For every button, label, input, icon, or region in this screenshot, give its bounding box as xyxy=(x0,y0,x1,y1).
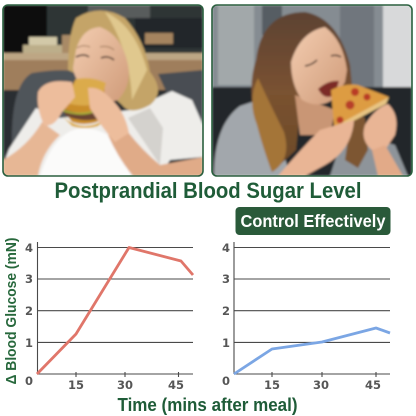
chart: uncontrolled glucose: 4 xyxy=(25,241,33,255)
badge: control effectively xyxy=(236,207,390,235)
photo: woman eating burger xyxy=(3,5,203,176)
chart: uncontrolled glucose: 15 xyxy=(68,378,84,392)
chart: uncontrolled glucose: 1 xyxy=(25,336,33,350)
chart: uncontrolled glucose: 45 xyxy=(168,378,184,392)
title: Postprandial Blood Sugar Level xyxy=(54,178,362,203)
badge: control effectively: Control Effectively xyxy=(240,211,386,231)
chart: controlled glucose: 0 xyxy=(222,374,230,388)
chart: controlled glucose xyxy=(222,241,390,392)
chart: controlled glucose: 3 xyxy=(222,272,230,286)
chart: uncontrolled glucose xyxy=(25,241,193,392)
chart: controlled glucose: 15 xyxy=(264,378,280,392)
chart: controlled glucose: 4 xyxy=(222,241,230,255)
chart: controlled glucose: 2 xyxy=(222,304,230,318)
photo: woman eating pizza xyxy=(212,5,412,176)
line: red glucose curve xyxy=(37,248,193,374)
chart: uncontrolled glucose: 0 xyxy=(25,374,33,388)
x axis label: Time (mins after meal) xyxy=(118,395,298,415)
chart: uncontrolled glucose: 2 xyxy=(25,304,33,318)
y axis label: Δ Blood Glucose (mN) xyxy=(3,238,20,384)
chart: controlled glucose: 45 xyxy=(365,378,381,392)
line: blue glucose curve xyxy=(234,328,390,374)
chart: controlled glucose: 1 xyxy=(222,336,230,350)
chart: controlled glucose: 30 xyxy=(313,378,329,392)
chart: uncontrolled glucose: 30 xyxy=(117,378,133,392)
chart: uncontrolled glucose: 3 xyxy=(25,272,33,286)
